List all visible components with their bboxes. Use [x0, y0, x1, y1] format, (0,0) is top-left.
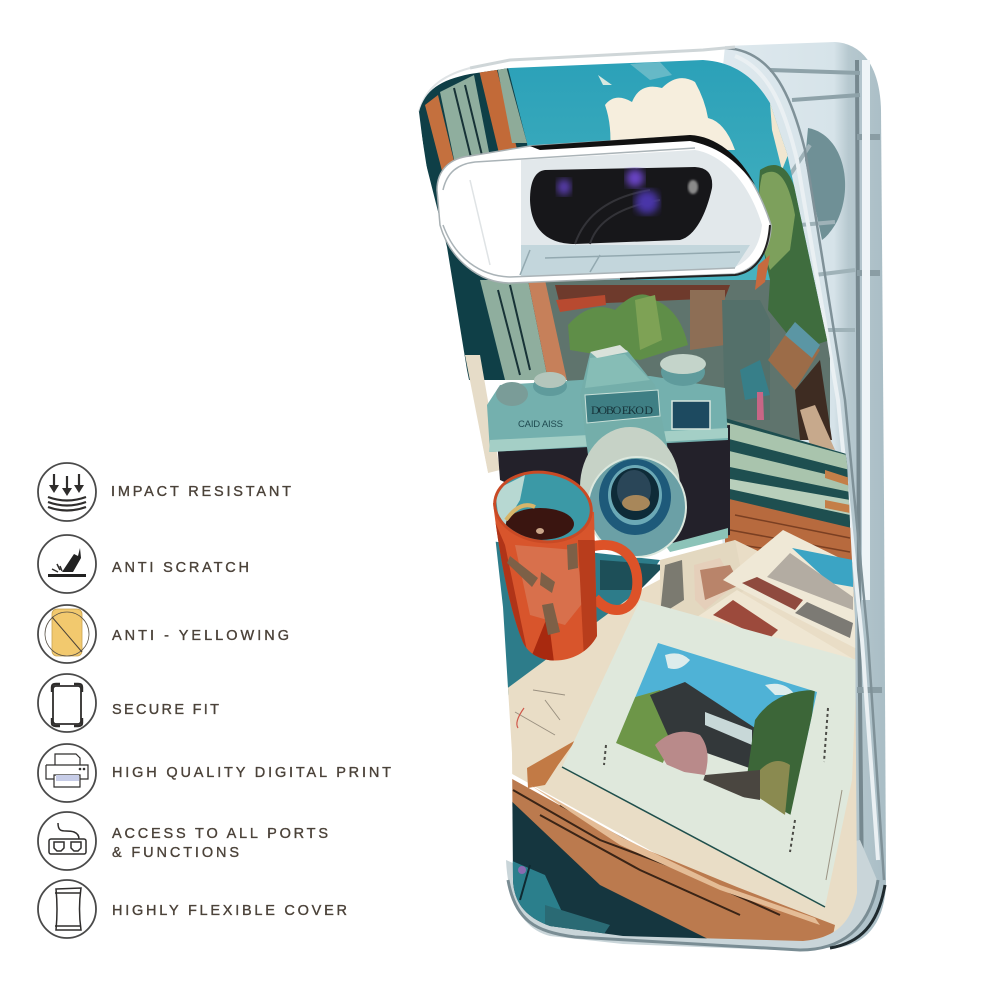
vintage camera — [487, 345, 730, 557]
hut — [768, 328, 820, 390]
feature: anti yellowing: ANTI - YELLOWING — [112, 628, 289, 644]
red coffee mug — [488, 464, 637, 670]
railing — [725, 418, 850, 530]
cutout rim — [437, 136, 771, 283]
wood table — [725, 498, 860, 600]
white paper scrap at left — [465, 355, 500, 473]
framed building photograph — [610, 640, 820, 820]
printed artwork — [410, 50, 860, 950]
feature: highly flexible cover: HIGHLY FLEXIBLE COVER — [112, 903, 347, 919]
feature: impact resistant: IMPACT RESISTANT — [111, 484, 291, 500]
table shadow area — [496, 542, 660, 696]
feature: access to all ports and functions: & FUNCTIONS — [112, 845, 239, 861]
wood edge — [505, 775, 835, 950]
feature: impact resistant — [38, 463, 291, 521]
dark desk front — [512, 802, 707, 938]
feature: anti scratch — [38, 535, 249, 593]
street scene — [545, 165, 835, 450]
phone lens module — [530, 167, 712, 244]
clouds — [598, 62, 790, 170]
left building — [419, 68, 567, 380]
trees — [568, 294, 688, 360]
viewfinder prism top — [590, 345, 628, 358]
sky — [500, 50, 830, 300]
feature: access to all ports and functions — [38, 812, 328, 870]
feature: secure fit: SECURE FIT — [112, 702, 219, 718]
feature: secure fit — [38, 674, 219, 732]
feature: anti scratch: ANTI SCRATCH — [112, 560, 249, 576]
rear phone body — [700, 42, 886, 948]
viewfinder window — [672, 401, 710, 429]
clear case rim — [419, 47, 885, 951]
feature: anti yellowing — [38, 605, 289, 663]
feature: high quality digital print: HIGH QUALITY DIGITAL PRINT — [112, 765, 391, 781]
paper sheets — [505, 540, 860, 950]
mat handwriting marks — [604, 708, 828, 852]
rim highlight — [443, 148, 735, 277]
large photo mat — [562, 600, 857, 907]
camera side label: CAID AISS — [518, 419, 563, 430]
upper snapshot prints — [699, 530, 856, 658]
feature: high quality digital print — [38, 744, 391, 802]
camera cutout — [437, 135, 771, 283]
feature: highly flexible cover — [38, 880, 347, 938]
rear camera circle — [805, 128, 845, 240]
clear window — [521, 150, 762, 277]
feature: access to all ports and functions: ACCESS TO ALL PORTS — [112, 826, 328, 842]
paper notes — [515, 690, 565, 735]
camera model label: DOBO EKO D — [591, 403, 653, 417]
phone with clear case — [410, 42, 886, 951]
lens — [580, 427, 680, 496]
dials — [661, 368, 705, 386]
feature list — [38, 463, 391, 938]
